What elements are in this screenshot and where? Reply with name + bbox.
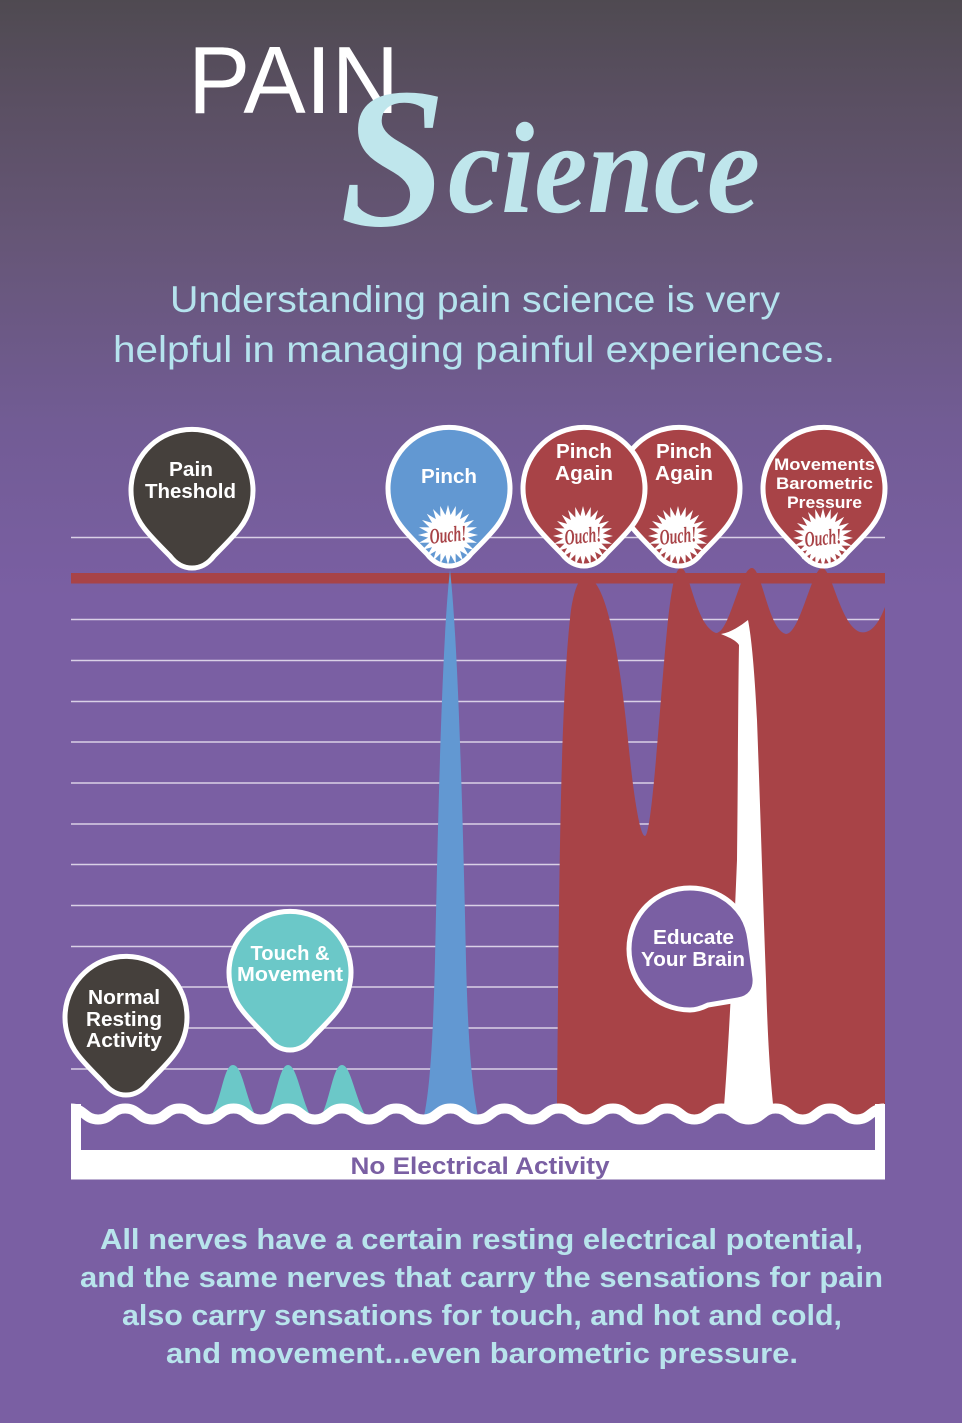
marker: second pinch again: Pinch [656, 441, 712, 463]
electrical spikes [204, 568, 885, 1130]
subtitle: helpful in managing painful experiences. [113, 329, 835, 370]
marker: movements barometric pressure: Movements [774, 455, 875, 474]
marker: touch and movement: Touch & [250, 943, 330, 965]
pain threshold line [71, 573, 885, 584]
explanatory paragraph: also carry sensations for touch, and hot and cold, [122, 1300, 842, 1332]
icon: ouch starburst: Ouch! [803, 523, 843, 552]
icon: ouch starburst [793, 508, 853, 568]
marker: normal resting activity [65, 956, 187, 1095]
icon: ouch starburst: Ouch! [658, 521, 698, 550]
marker: pinch [388, 427, 510, 566]
title word: Science: S [340, 48, 446, 269]
subtitle [113, 279, 835, 370]
marker: movements barometric pressure: Barometric [776, 474, 873, 493]
red sustained pain area [557, 568, 885, 1130]
marker: second pinch again: Again [655, 463, 713, 485]
marker: touch and movement [229, 911, 351, 1050]
title word: Science [340, 48, 760, 269]
marker: second pinch again [618, 427, 740, 566]
no electrical activity bracket [71, 1104, 885, 1180]
marker: pinch: Pinch [421, 466, 477, 488]
marker: movements barometric pressure: Pressure [787, 493, 862, 512]
icon: ouch starburst: Ouch! [428, 520, 468, 549]
marker: educate your brain [629, 888, 755, 1010]
marker: educate your brain: Your Brain [641, 949, 745, 971]
marker: normal resting activity: Resting [86, 1009, 162, 1031]
marker: pain threshold: Theshold [145, 481, 236, 503]
icon: ouch starburst: Ouch! [563, 521, 603, 550]
marker: normal resting activity: Normal [88, 987, 160, 1009]
title [188, 27, 760, 269]
marker: normal resting activity: Activity [86, 1030, 163, 1052]
title word: Science: cience [448, 97, 760, 241]
marker: pain threshold: Pain [169, 459, 213, 481]
marker: pain threshold [131, 429, 253, 568]
marker: first pinch again: Again [555, 463, 613, 485]
marker: educate your brain: Educate [653, 927, 734, 949]
teal touch and movement waves [212, 1065, 364, 1114]
bracket label: No Electrical Activity [350, 1153, 610, 1180]
explanatory paragraph: All nerves have a certain resting electrical potential, [100, 1224, 863, 1256]
white educate spike [721, 620, 776, 1130]
explanatory paragraph: and the same nerves that carry the sensations for pain [80, 1262, 883, 1294]
marker: touch and movement: Movement [237, 964, 343, 986]
explanatory paragraph: and movement...even barometric pressure. [166, 1338, 798, 1370]
title word: Pain: PAIN [188, 27, 399, 134]
blue pinch spike [422, 570, 480, 1125]
marker: first pinch again: Pinch [556, 441, 612, 463]
explanatory paragraph [80, 1224, 883, 1370]
resting baseline wave [71, 1108, 884, 1120]
marker: first pinch again [523, 427, 645, 566]
chart: nerve electrical activity [71, 538, 885, 1180]
subtitle: Understanding pain science is very [170, 279, 781, 320]
marker: movements barometric pressure [763, 427, 885, 568]
